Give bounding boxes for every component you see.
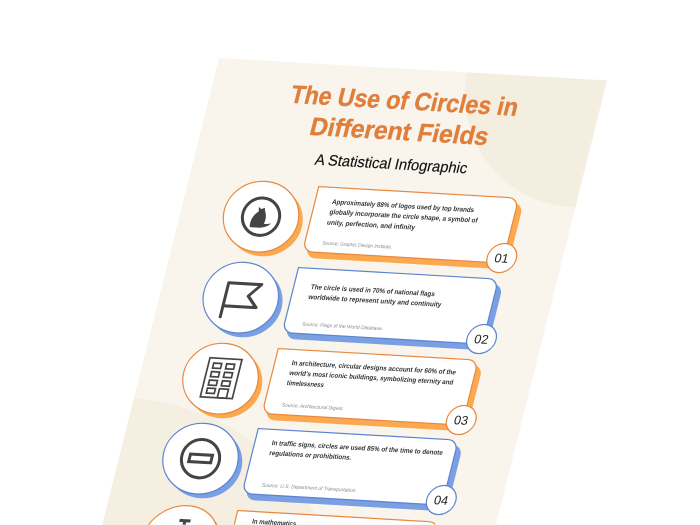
card 3 bbox=[260, 349, 491, 435]
card text line 2: globally incorporate the circle shape, a symbol of bbox=[329, 209, 479, 225]
source: Source: U.S. Department of Transportation. bbox=[261, 483, 357, 494]
item 4 bbox=[148, 421, 471, 515]
title line 2: Different Fields bbox=[307, 113, 492, 151]
infographic page bbox=[102, 58, 607, 525]
number badge bbox=[423, 485, 459, 515]
number badge bbox=[463, 324, 500, 354]
card 5 bbox=[234, 511, 436, 525]
source: Source: Flags of the World Database. bbox=[301, 322, 384, 332]
title: The Use of Circles in bbox=[288, 81, 521, 122]
card text line 2: regulations or prohibitions. bbox=[268, 450, 352, 462]
card text line 2: world's most iconic buildings, symbolizing eternity and bbox=[287, 370, 454, 387]
icon: building bbox=[200, 358, 242, 399]
card text: The circle is used in 70% of national flags bbox=[310, 284, 436, 298]
circle icon badge 5 bbox=[148, 504, 222, 525]
page background bbox=[102, 58, 607, 525]
circle icon badge 1 bbox=[209, 179, 317, 258]
item 3 bbox=[168, 341, 491, 435]
circle icon badge 2 bbox=[189, 260, 297, 339]
card 2 bbox=[280, 268, 511, 354]
card text: In architecture, circular designs account for 60% of the bbox=[291, 360, 457, 377]
icon: flag bbox=[220, 283, 262, 319]
number badge: 03 bbox=[452, 413, 470, 428]
number badge: 02 bbox=[473, 332, 490, 347]
card text line 3: unity, perfection, and infinity bbox=[326, 220, 416, 232]
card 1 bbox=[300, 187, 531, 273]
card text line 3: timelessness bbox=[286, 380, 325, 389]
source: Source: Architectural Digest. bbox=[281, 403, 344, 412]
card text line 2: worldwide to represent unity and continuity bbox=[306, 294, 442, 309]
item 1 bbox=[209, 179, 532, 273]
card text: Approximately 88% of logos used by top brands bbox=[331, 199, 475, 214]
circle icon badge 4 bbox=[149, 421, 256, 500]
number badge bbox=[443, 405, 479, 435]
number badge bbox=[484, 243, 520, 273]
source: Source: Graphic Design Institute. bbox=[322, 241, 393, 251]
item 2 bbox=[188, 260, 512, 354]
card text: In traffic signs, circles are used 85% of the time to denote bbox=[271, 440, 444, 457]
circle icon badge 3 bbox=[169, 341, 276, 420]
number badge: 01 bbox=[493, 251, 510, 266]
number badge: 04 bbox=[432, 493, 450, 508]
subtitle: A Statistical Infographic bbox=[313, 152, 470, 177]
icon: cat in circle bbox=[235, 197, 287, 236]
icon: math symbol bbox=[178, 520, 190, 525]
icon: no-entry sign bbox=[174, 438, 227, 479]
card 4 bbox=[240, 429, 471, 515]
item 5 bbox=[148, 504, 436, 525]
